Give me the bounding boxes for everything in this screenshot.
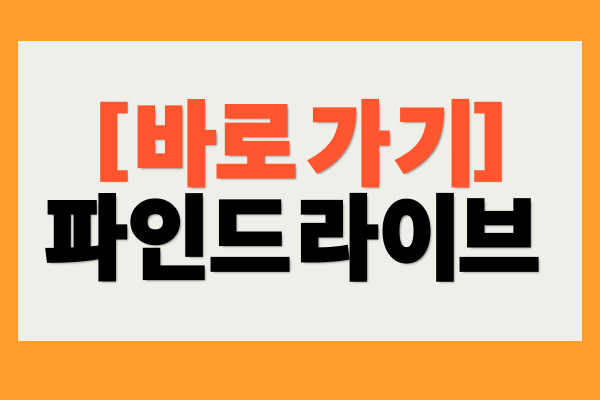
title: 파인드라이브: 파	[45, 166, 127, 297]
heading: [바로가기]: 기	[394, 72, 476, 203]
title: 파인드라이브: 이	[379, 166, 461, 297]
heading: [바로가기]: [	[94, 82, 130, 193]
title: 파인드라이브: 인	[128, 166, 210, 297]
title: 파인드라이브: 브	[458, 166, 540, 297]
title: 파인드라이브: 드	[209, 166, 291, 297]
title: 파인드라이브	[45, 166, 540, 297]
heading: [바로가기]	[94, 72, 508, 203]
panel: background card	[18, 41, 582, 341]
heading: [바로가기]: 가	[308, 72, 390, 203]
heading: [바로가기]: 바	[134, 72, 216, 203]
title: 파인드라이브: 라	[296, 166, 378, 297]
heading: [바로가기]: 로	[215, 72, 297, 203]
heading: [바로가기]: ]	[472, 82, 508, 193]
